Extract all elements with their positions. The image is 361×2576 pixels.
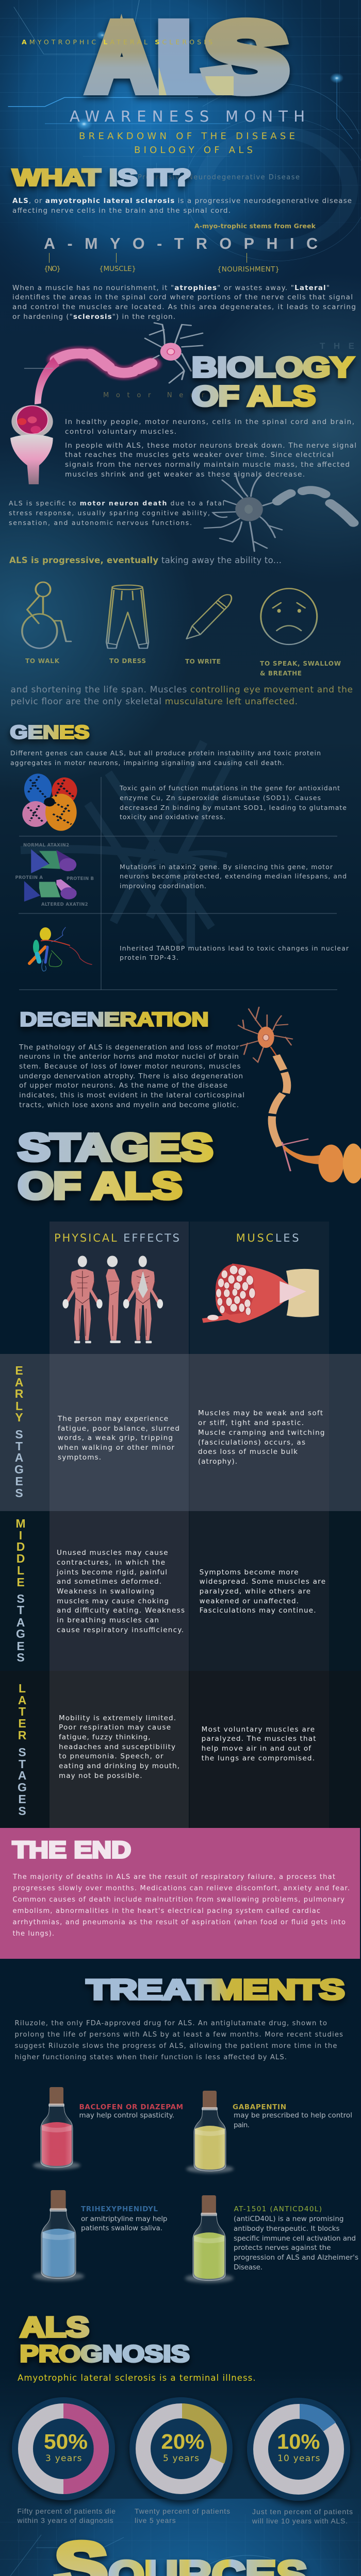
heading: the biology of als: OF ALS [192, 380, 316, 412]
panel: physical effects [50, 1222, 189, 1354]
text: degeneration: stem. Because of loss of lower motor neurons, muscles [19, 1062, 240, 1071]
icon: green bottle [185, 2195, 234, 2283]
chart: 50 percent donut [12, 2397, 115, 2500]
row: middle stages: STAGES [16, 1592, 25, 1664]
row: middle stages: Fasciculations may continue. [200, 1606, 316, 1615]
text: atrophy explanation: and control the muscles are located. As this area degenerates, it leads to scarring [12, 303, 356, 311]
row: later stages: LATER [18, 1682, 27, 1742]
row: middle stages: in breathing muscles can [57, 1616, 159, 1624]
row: later stages: Poor respiration may cause [59, 1723, 171, 1732]
text: ataxin2: improving coordination. [120, 882, 206, 890]
illustration: muscular body figures [62, 1256, 163, 1343]
heading: sources [55, 2529, 307, 2576]
treatment: gabapentin: may be prescribed to help control [234, 2111, 352, 2120]
text: atrophy explanation: identifies the areas in the spinal cord where portions of the nerve cells that signal [12, 293, 353, 301]
chart: 20 percent donut [129, 2397, 233, 2500]
icon labels: TO DRESS [109, 657, 146, 665]
illustration: muscle bundle [203, 1264, 319, 1323]
text: people with als: muscles shrink and get weaker as these signals decrease. [65, 470, 305, 479]
row: early stages: (atrophy). [198, 1458, 237, 1466]
row: early stages: The person may experience [57, 1415, 168, 1423]
treatment: trihexyphenidyl [33, 2190, 168, 2281]
etymology: {MUSCLE} [99, 265, 136, 273]
row: later stages: may not be possible. [59, 1772, 142, 1780]
text: healthy people: control voluntary muscles. [65, 428, 176, 436]
text: TARDBP [120, 944, 349, 961]
caption: motor neurons: Motor Neurons [103, 392, 237, 399]
text: atrophy explanation: or hardening ("sclerosis") in the region. [12, 313, 175, 321]
row: early stages: Muscles may be weak and soft [198, 1409, 323, 1417]
row: middle stages: paralyzed, while others are [200, 1587, 310, 1596]
text: people with als [65, 442, 356, 479]
row: middle stages: and difficulty eating. Weakness [57, 1606, 185, 1615]
row: middle stages: and sometimes deformed. [57, 1578, 161, 1586]
captions: donut descriptions [17, 2507, 353, 2525]
panel: the end: embolism, abnormalities in the heart's electrical pacing system called cardiac [12, 1907, 320, 1915]
text: riluzole: Riluzole, the only FDA-approved drug for ALS. An antiglutamate drug, shown to [14, 2020, 327, 2027]
treatment: gabapentin: pain. [234, 2121, 250, 2129]
illustration: ataxin proteins: ALTERED AXATIN2 [41, 902, 88, 907]
heading: stages of als [18, 1126, 213, 1207]
treatment: trihexyphenidyl: or amitriptyline may help [81, 2215, 167, 2223]
chart: 50 percent donut: 50% [44, 2430, 88, 2453]
text: degeneration: neurons in the anterior horns and motor nuclei of brain [19, 1053, 239, 1061]
icon: sad face [261, 588, 317, 645]
treatment: AT-1501: (antiCD40L) is a new promising [234, 2215, 343, 2223]
row: middle stages: contractures, in which the [57, 1558, 165, 1567]
text: degeneration [19, 1043, 244, 1109]
text: degeneration: The pathology of ALS is degeneration and loss of motor [19, 1043, 239, 1052]
illustration: pink motor neuron [10, 323, 203, 484]
chart: 10 percent donut: 10% [277, 2430, 320, 2453]
heading: awareness month: AWARENESS MONTH [70, 108, 305, 125]
heading: what is it: WHAT IS IT? [12, 164, 191, 191]
text: ataxin2 [120, 863, 347, 890]
subtitle: amyotrophic lateral sclerosis: A MYOTROPHIC L ATERAL S CLEROSIS [22, 38, 212, 46]
text: motor neuron death: ALS is specific to motor neuron death due to a fatal [9, 499, 224, 507]
heading: stages of als: OF ALS [18, 1165, 182, 1207]
genes table rules [19, 777, 337, 990]
text: SOD1: enzyme Cu, Zn superoxide dismutase (SOD1). Causes [120, 794, 321, 802]
panel: the end: the lungs). [12, 1930, 54, 1938]
treatment: AT-1501: Disease. [234, 2263, 262, 2272]
row: middle stages: muscles may cause choking [57, 1597, 169, 1605]
icon: pencil [187, 595, 232, 639]
etymology: A-MYO-TROPHIC [44, 235, 318, 252]
heading: the biology of als: BIOLOGY [192, 351, 354, 383]
text: SOD1: toxicity and oxidative stress. [120, 813, 225, 821]
row: middle stages: widespread. Some muscles are [200, 1578, 325, 1586]
row: early stages: or stiff, tight and spastic. [198, 1419, 304, 1427]
text: healthy people: In healthy people, motor neurons, cells in the spinal cord and brain, [65, 418, 354, 426]
caption: greek: A-myo-trophic stems from Greek [194, 222, 316, 230]
text: healthy people [65, 418, 354, 436]
title: ALS [89, 4, 287, 110]
text: ataxin2: Mutations in ataxin2 gene. By silencing this gene, motor [120, 863, 333, 871]
row: early stages: EARLY [15, 1364, 24, 1424]
heading: the biology of als [192, 341, 354, 412]
icon: pants [106, 585, 149, 648]
etymology: {NO} [44, 265, 61, 273]
icon labels: TO WALK [25, 657, 60, 665]
icon: blue bottle [33, 2190, 84, 2281]
text: SOD1: Toxic gain of function mutations in the gene for antioxidant [119, 784, 340, 792]
text: ataxin2: neurons become protected, extending median lifespans, and [120, 872, 347, 880]
icon: wheelchair [22, 582, 71, 648]
icon labels: TO WRITE [185, 658, 221, 665]
panel: the end: THE END [12, 1837, 131, 1863]
captions: donut descriptions: Fifty percent of patients die [18, 2507, 116, 2515]
row: middle stages: joints become rigid, painful [56, 1568, 167, 1577]
title: ALS: A [89, 4, 155, 110]
text: riluzole: prolong the life of persons with ALS by at least a few months. More recent studies [14, 2031, 343, 2039]
row: later stages: Mobility is extremely limited. [59, 1714, 176, 1722]
captions: donut descriptions: will live 10 years with ALS. [252, 2517, 348, 2525]
row: early stages: (fasciculations) occurs, as [198, 1438, 305, 1447]
row: middle stages: Weakness in swallowing [57, 1587, 154, 1596]
heading: als prognosis [20, 2311, 190, 2367]
title: ALS: S [205, 4, 287, 110]
panel: the end: progresses slowly over months. Medications can relieve discomfort, anxiety and fear. [13, 1885, 350, 1892]
text: SOD1 [119, 784, 347, 821]
row: later stages: the lungs are compromised. [202, 1754, 315, 1762]
text: people with als: signals from the nerves normally maintain muscle mass, the affected [65, 461, 350, 469]
text: terminal illness: Amyotrophic lateral sclerosis is a terminal illness. [18, 2373, 256, 2383]
text: genes intro: aggregates in motor neurons, impairing signaling and causing cell death. [10, 759, 284, 767]
row: early stages: STAGES [14, 1428, 24, 1500]
text: degeneration: undergo denervation atrophy. There is also degeneration [19, 1072, 243, 1080]
treatment: AT-1501: specific immune cell activation and [234, 2234, 356, 2243]
row: later stages: Most voluntary muscles are [202, 1725, 315, 1734]
illustration: grey neuron [204, 474, 353, 551]
text: motor neuron death: sensation, and autonomic nervous functions. [9, 519, 192, 527]
caption: progressive neurodegenerative disease: Progressive Neurodegenerative Disease [138, 174, 300, 181]
icon: red bottle [33, 2087, 80, 2170]
treatment: AT-1501: protects nerves against the [234, 2244, 331, 2252]
text: degeneration: indicates, this is most evident in the lateral corticospinal [19, 1091, 244, 1099]
illustration: TDP-43 protein [29, 927, 92, 971]
captions: donut descriptions: Twenty percent of patients [135, 2507, 230, 2515]
panel: the end: Common causes of death include malnutrition from swallowing problems, pulmonary [12, 1896, 344, 1904]
text: motor neuron death [9, 499, 224, 527]
captions: donut descriptions: Just ten percent of patients [252, 2507, 353, 2516]
text: definition: ALS, or amyotrophic lateral sclerosis is a progressive neurodegenerative disease [12, 197, 352, 205]
heading: als prognosis: ALS [20, 2311, 89, 2343]
panel: physical effects: PHYSICAL EFFECTS [54, 1232, 179, 1244]
text: degeneration: of upper motor neurons. As the name of the disease [19, 1081, 227, 1090]
heading: the biology of als: THE [320, 341, 354, 351]
row: middle stages: weakened or unaffected. [200, 1597, 299, 1605]
heading: progressive: ALS is progressive, eventually taking away the ability to... [9, 555, 282, 565]
heading: treatments: TREATMENTS [87, 1973, 344, 2005]
treatment: baclofen: may help control spasticity. [79, 2111, 174, 2120]
row: later stages: headaches and susceptibility [59, 1743, 175, 1751]
treatment: AT-1501: antibody therapeutic. It blocks [234, 2225, 339, 2233]
illustration: orange neuron [238, 1007, 361, 1183]
text: atrophy explanation [12, 284, 356, 321]
row: middle stages: cause respiratory insufficiency. [57, 1626, 184, 1634]
title: ALS: L [157, 4, 229, 110]
panel: the end [0, 1828, 360, 1959]
captions: donut descriptions: live 5 years [135, 2516, 176, 2524]
captions: donut descriptions: within 3 years of diagnosis [17, 2516, 113, 2524]
chart: 50 percent donut: 3 years [45, 2453, 82, 2464]
text: genes intro [10, 749, 321, 767]
chart: 20 percent donut: 20% [161, 2430, 204, 2453]
treatment: baclofen [33, 2087, 183, 2170]
icon labels [25, 657, 341, 677]
text: genes intro: Different genes can cause ALS, but all produce protein instability and toxic protein [10, 749, 321, 757]
heading: als prognosis: PROGNOSIS [20, 2341, 190, 2367]
icon: yellow bottle [186, 2091, 234, 2173]
text: SOD1: decreased Zn binding by mutant SOD1, leading to glutamate [120, 804, 347, 811]
heading: degeneration: DEGENERATION [20, 1009, 208, 1030]
panel: muscles [190, 1222, 329, 1354]
row: early stages: Muscle cramping and twitching [198, 1429, 325, 1437]
row: later stages: paralyzed. The muscles that [202, 1735, 316, 1743]
chart: 10 percent donut: 10 years [277, 2453, 320, 2464]
icon labels: TO SPEAK, SWALLOW [260, 660, 341, 667]
treatment: AT-1501 [185, 2195, 358, 2283]
panel: the end: The majority of deaths in ALS are the result of respiratory failure, a process that [12, 1873, 335, 1881]
row: later stages: to pneumonia. Speech, or [59, 1752, 163, 1760]
treatment: gabapentin: GABAPENTIN [233, 2103, 286, 2111]
treatment: trihexyphenidyl: patients swallow saliva. [81, 2224, 162, 2232]
text: shortening life span [10, 685, 353, 707]
chart: 10 percent donut [247, 2398, 350, 2501]
treatment: AT-1501: progression of ALS and Alzheimer's [234, 2253, 358, 2262]
treatment: gabapentin [186, 2091, 352, 2173]
text: motor neuron death: stress response, usually sparing cognitive ability, [9, 509, 210, 517]
row: early stages: when walking or other minor [58, 1444, 174, 1452]
text: people with als: that reaches the muscles gets weaker over time. Since electrical [65, 451, 334, 459]
row: early stages [0, 1354, 361, 1511]
subheading: breakdown: BREAKDOWN OF THE DISEASE [79, 131, 295, 142]
heading: genes: GENES [10, 721, 90, 743]
row: middle stages: Symptoms become more [200, 1568, 299, 1577]
illustration: ataxin proteins: PROTEIN B [67, 876, 94, 882]
text: TARDBP: protein TDP-43. [120, 954, 178, 961]
illustration: SOD1 protein [22, 774, 77, 831]
row: middle stages: MIDDLE [15, 1517, 26, 1589]
illustration: ataxin proteins: PROTEIN A [15, 875, 43, 880]
heading: stages of als: STAGES [18, 1126, 213, 1168]
row: later stages: STAGES [18, 1745, 27, 1818]
row: middle stages: Unused muscles may cause [57, 1549, 168, 1557]
row: middle stages [0, 1511, 361, 1671]
treatment: baclofen: BACLOFEN OR DIAZEPAM [79, 2103, 183, 2111]
text: riluzole: suggest Riluzole slows the progress of ALS, allowing the patient more time in the [14, 2042, 337, 2050]
row: later stages: eating and drinking by mouth, [59, 1762, 179, 1770]
text: riluzole [14, 2020, 343, 2061]
row: early stages: does loss of muscle bulk [198, 1448, 298, 1456]
row: early stages: words, a weak grip, tripping [58, 1434, 173, 1442]
treatment: AT-1501: AT-1501 (ANTICD40L) [234, 2205, 322, 2213]
text: riluzole: higher functioning states when their function is less affected by ALS. [14, 2054, 287, 2061]
icon labels: & BREATHE [260, 670, 302, 677]
row: early stages: symptoms. [58, 1453, 101, 1462]
illustration: ataxin proteins [15, 843, 94, 907]
row: later stages: help move air in and out of [202, 1744, 311, 1753]
row: later stages: fatigue, fuzzy thinking, [59, 1733, 151, 1741]
illustration: ataxin proteins: NORMAL ATAXIN2 [23, 843, 69, 848]
panel: muscles: MUSCLES [236, 1232, 299, 1244]
text: people with als: In people with ALS, these motor neurons break down. The nerve signal [65, 442, 356, 450]
text: definition: affecting nerve cells in the brain and the spinal cord. [12, 207, 231, 215]
chart: 20 percent donut: 5 years [163, 2453, 199, 2464]
panel: the end: arrhythmias, and pneumonia as the result of aspiration (when food or fluid gets into [12, 1919, 346, 1926]
subheading: biology: BIOLOGY OF ALS [134, 145, 253, 156]
text: shortening life span: and shortening the life span. Muscles controlling eye movement and the [10, 685, 353, 695]
text: atrophy explanation: When a muscle has no nourishment, it "atrophies" or wastes away. "Lateral" [12, 284, 330, 292]
text: degeneration: tracts, which lose axons and myelin and become gliotic. [19, 1101, 239, 1109]
etymology: {NOURISHMENT} [217, 265, 280, 274]
text: TARDBP: Inherited TARDBP mutations lead to toxic changes in nuclear [120, 944, 349, 952]
row: later stages [0, 1671, 361, 1828]
treatment: trihexyphenidyl: TRIHEXYPHENIDYL [81, 2205, 158, 2213]
etymology [44, 235, 318, 274]
text: shortening life span: pelvic floor are the only skeletal musculature left unaffected. [10, 697, 298, 707]
row: early stages: fatigue, poor balance, slurred [58, 1425, 179, 1433]
text: definition [12, 197, 352, 215]
